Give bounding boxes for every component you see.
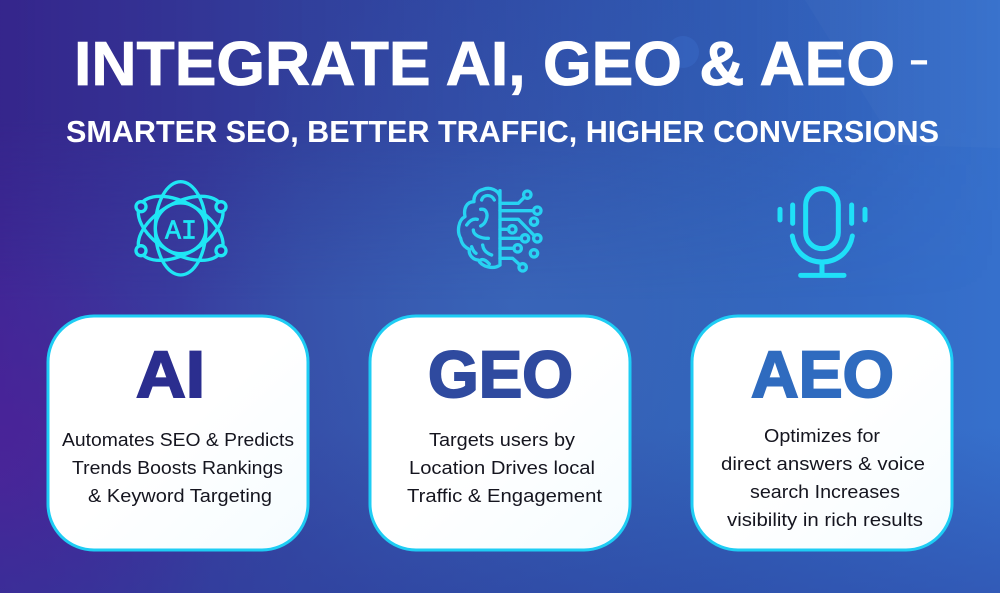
icon: AI atom: AI	[165, 217, 197, 247]
text: AI description	[62, 430, 294, 506]
title: -	[908, 27, 930, 89]
panel: AI	[48, 316, 308, 550]
card: AEO	[692, 316, 952, 550]
title: INTEGRATE AI, GEO & AEO	[74, 30, 895, 99]
text: AI description: Automates SEO & Predicts	[62, 430, 294, 450]
text: AEO description	[721, 426, 925, 530]
icon: AI atom	[128, 182, 234, 275]
card: GEO	[370, 316, 630, 550]
panel: GEO	[370, 316, 630, 550]
panel: AEO	[692, 316, 952, 550]
text: AEO description: direct answers & voice	[721, 454, 925, 474]
text: AI description: Trends Boosts Rankings	[72, 458, 283, 478]
text: GEO description	[407, 430, 602, 506]
text: AEO description: visibility in rich results	[727, 510, 923, 530]
text: GEO description: Targets users by	[429, 430, 575, 450]
text: AI description: & Keyword Targeting	[88, 486, 272, 506]
subtitle: SMARTER SEO, BETTER TRAFFIC, HIGHER CONVERSIONS	[66, 114, 939, 149]
text: AEO description: search Increases	[750, 482, 900, 502]
card: AI	[48, 316, 308, 550]
text: GEO description: Traffic & Engagement	[407, 486, 602, 506]
heading: GEO: GEO	[428, 337, 573, 411]
icon: microphone	[780, 189, 865, 275]
text: GEO description: Location Drives local	[409, 458, 595, 478]
text: AEO description: Optimizes for	[764, 426, 880, 446]
heading: AEO: AEO	[751, 337, 894, 411]
icon: brain circuit	[459, 188, 541, 271]
heading: AI: AI	[136, 337, 205, 411]
